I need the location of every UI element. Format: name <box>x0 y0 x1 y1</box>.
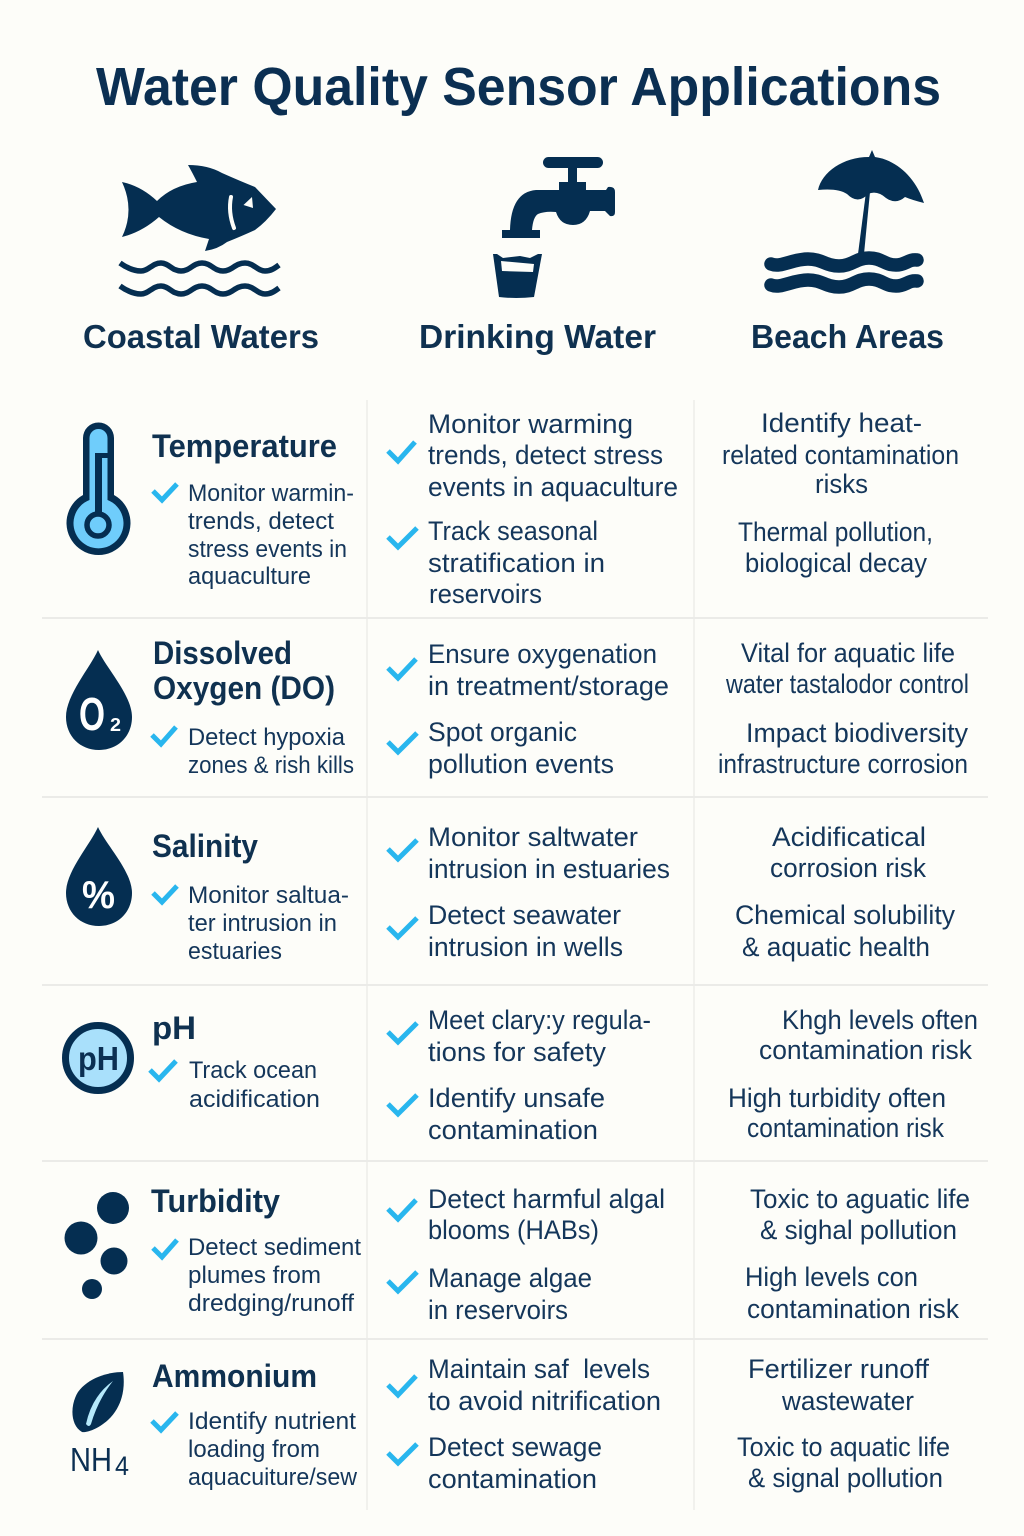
coastal note: Detect hypoxia <box>188 724 345 751</box>
drinking water notes: in reservoirs <box>428 1295 568 1325</box>
coastal note <box>153 480 354 590</box>
beach notes <box>745 1184 970 1324</box>
coastal note: trends, detect <box>188 508 334 535</box>
beach notes: water tastalodor control <box>725 669 969 699</box>
drinking water notes: intrusion in estuaries <box>428 854 670 884</box>
heading: Dissolved Oxygen (DO): Oxygen (DO) <box>153 670 335 706</box>
drinking water notes: Maintain saf levels <box>428 1354 650 1384</box>
icon: particles <box>64 1192 129 1299</box>
beach notes <box>718 638 969 779</box>
coastal note: Monitor warmin- <box>188 480 354 507</box>
beach notes <box>722 408 959 578</box>
icon: leaf with NH4 <box>70 1372 129 1481</box>
row: pH <box>66 1005 978 1145</box>
beach notes: biological decay <box>745 548 927 578</box>
beach notes: contamination risk <box>759 1035 972 1065</box>
drinking water notes: Meet clary:y regula- <box>428 1005 651 1035</box>
drinking water notes <box>388 409 678 609</box>
row: Dissolved Oxygen <box>66 635 969 779</box>
beach notes: contamination risk <box>747 1294 959 1324</box>
coastal note: stress events in <box>188 536 347 563</box>
drinking water notes: Manage algae <box>428 1263 592 1293</box>
icon: leaf with NH4: NH <box>70 1441 112 1478</box>
icon: drop with O2 <box>66 650 132 750</box>
beach notes <box>728 1005 978 1143</box>
drinking water notes: Detect sewage <box>428 1432 602 1462</box>
beach notes: Thermal pollution, <box>738 517 933 547</box>
column header: Beach Areas <box>751 150 944 355</box>
coastal note: Track ocean <box>189 1057 317 1084</box>
beach notes: & sighal pollution <box>760 1215 957 1245</box>
coastal note: aquacuiture/sew <box>188 1464 357 1491</box>
drinking water notes: Track seasonal <box>428 516 598 546</box>
drinking water notes: contamination <box>428 1115 598 1145</box>
beach notes: related contamination <box>722 440 959 470</box>
heading: Salinity: Salinity <box>152 828 258 864</box>
beach notes: Toxic to aguatic life <box>750 1184 970 1214</box>
beach notes: corrosion risk <box>770 853 926 883</box>
drinking water notes: blooms (HABs) <box>428 1215 599 1245</box>
drinking water notes: Ensure oxygenation <box>428 639 657 669</box>
coastal note <box>153 1234 361 1317</box>
drinking water notes <box>388 1005 651 1145</box>
row: Salinity <box>66 822 955 965</box>
drinking water notes <box>388 639 669 779</box>
beach notes: Toxic to aquatic life <box>737 1432 950 1462</box>
drinking water notes: Monitor warming <box>428 409 633 439</box>
heading: Coastal Waters: Coastal Waters <box>83 318 319 355</box>
drinking water notes: in treatment/storage <box>428 671 669 701</box>
beach notes: & aquatic health <box>742 932 930 962</box>
beach notes <box>737 1354 950 1493</box>
coastal note <box>153 882 349 965</box>
drinking water notes: intrusion in wells <box>428 932 623 962</box>
beach notes: Fertilizer runoff <box>748 1354 930 1384</box>
icon: pH circle: pH <box>78 1040 119 1077</box>
drinking water notes: events in aquaculture <box>428 472 678 502</box>
beach notes: infrastructure corrosion <box>718 749 968 779</box>
row: Turbidity <box>64 1183 970 1325</box>
heading: Dissolved Oxygen (DO) <box>153 635 335 706</box>
beach notes: High turbidity often <box>728 1083 946 1113</box>
drinking water notes: tions for safety <box>428 1037 606 1067</box>
drinking water notes: Detect harmful algal <box>428 1184 665 1214</box>
beach notes: risks <box>815 469 868 499</box>
drinking water notes: reservoirs <box>429 579 542 609</box>
beach notes: contamination risk <box>747 1113 944 1143</box>
coastal note <box>152 1408 357 1491</box>
beach notes: wastewater <box>781 1386 914 1416</box>
drinking water notes: Identify unsafe <box>428 1083 605 1113</box>
column header: Drinking Water <box>419 157 656 355</box>
beach notes: Khgh levels often <box>782 1005 978 1035</box>
drinking water notes: contamination <box>428 1464 597 1494</box>
beach notes: Identify heat- <box>761 408 922 438</box>
icon: drop with O2: O <box>79 688 105 740</box>
heading: Ammonium: Ammonium <box>152 1358 317 1394</box>
coastal note: aquaculture <box>188 563 311 590</box>
title: Water Quality Sensor Applications <box>96 57 941 117</box>
heading: pH: pH <box>152 1010 196 1046</box>
beach notes: Impact biodiversity <box>746 718 968 748</box>
icon: pH circle <box>66 1026 130 1090</box>
coastal note: loading from <box>188 1436 320 1463</box>
coastal note: Identify nutrient <box>188 1408 356 1435</box>
coastal note: plumes from <box>188 1262 321 1289</box>
coastal note: zones & rish kills <box>188 752 354 779</box>
icon: leaf with NH4: 4 <box>115 1451 129 1481</box>
heading: Turbidity: Turbidity <box>151 1183 280 1219</box>
drinking water notes: Detect seawater <box>428 900 621 930</box>
drinking water notes: to avoid nitrification <box>428 1386 661 1416</box>
drinking water notes: pollution events <box>428 749 614 779</box>
icon: drop with O2: 2 <box>110 715 121 735</box>
icon: drop with percent: % <box>82 874 115 917</box>
heading: Beach Areas: Beach Areas <box>751 318 944 355</box>
coastal note <box>152 724 354 779</box>
heading: Temperature: Temperature <box>152 428 337 464</box>
row: Temperature <box>66 408 959 609</box>
beach notes: Chemical solubility <box>735 900 955 930</box>
column header: Coastal Waters <box>83 165 319 355</box>
coastal note <box>150 1057 320 1113</box>
drinking water notes: Monitor saltwater <box>428 822 638 852</box>
beach notes <box>735 822 955 962</box>
icon: beach umbrella above waves <box>771 150 924 287</box>
icon: drop with percent <box>66 827 132 926</box>
coastal note: dredging/runoff <box>188 1290 354 1317</box>
row: Ammonium <box>70 1354 950 1494</box>
drinking water notes: stratification in <box>428 548 605 578</box>
coastal note: estuaries <box>188 938 282 965</box>
heading: Dissolved Oxygen (DO): Dissolved <box>153 635 292 671</box>
drinking water notes <box>388 1354 661 1494</box>
drinking water notes: Spot organic <box>428 717 577 747</box>
coastal note: Detect sediment <box>188 1234 361 1261</box>
icon: fish above waves <box>120 165 279 294</box>
beach notes: Vital for aquatic life <box>741 638 955 668</box>
beach notes: Acidificatical <box>772 822 926 852</box>
beach notes: High levels con <box>745 1262 918 1292</box>
heading: Drinking Water: Drinking Water <box>419 318 656 355</box>
beach notes: & signal pollution <box>748 1463 943 1493</box>
coastal note: Monitor saltua- <box>188 882 349 909</box>
drinking water notes: trends, detect stress <box>428 440 663 470</box>
coastal note: acidification <box>189 1086 320 1113</box>
drinking water notes <box>388 1184 665 1325</box>
coastal note: ter intrusion in <box>188 910 337 937</box>
icon: faucet and cup <box>493 157 615 298</box>
drinking water notes <box>388 822 670 962</box>
icon: thermometer <box>66 422 130 555</box>
